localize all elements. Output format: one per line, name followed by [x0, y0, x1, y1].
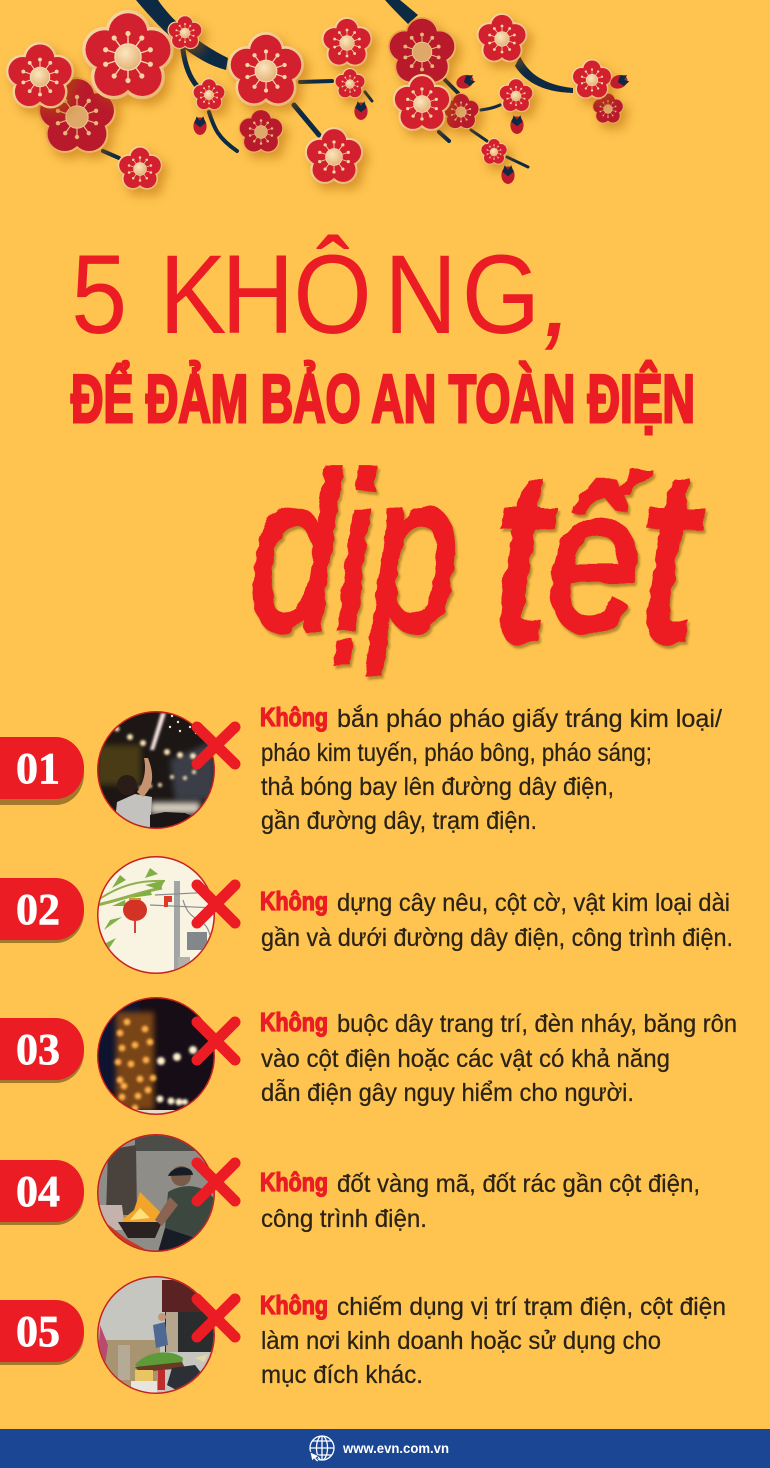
text 03: [260, 1007, 737, 1107]
number badge 03: 03: [16, 1025, 60, 1074]
cherry blossoms left cluster: [6, 10, 372, 190]
text 04: đốt vàng mã, đốt rác gần cột điện,: [337, 1170, 700, 1198]
item 04: [0, 1133, 700, 1253]
text 01: Không: [260, 702, 328, 732]
number badge 05: [0, 1300, 84, 1365]
website: www.evn.com.vn: [342, 1440, 449, 1456]
text 02: [260, 886, 733, 952]
photo: burning votive paper: [96, 1133, 216, 1253]
text 03: dẫn điện gây nguy hiểm cho người.: [261, 1078, 634, 1107]
item 02: [0, 855, 733, 981]
footer bar: [0, 1429, 770, 1468]
text 02: Không: [260, 886, 328, 916]
title brush lettering: t: [640, 418, 702, 692]
title line 1: ,: [544, 256, 567, 355]
photo: lantern and electric pole: [96, 855, 216, 981]
text 05: Không: [260, 1290, 328, 1320]
text 03: Không: [260, 1007, 328, 1037]
text 05: làm nơi kinh doanh hoặc sử dụng cho: [261, 1327, 661, 1355]
text 02: dựng cây nêu, cột cờ, vật kim loại dài: [337, 889, 730, 917]
item 03: [0, 996, 737, 1116]
icon: globe: [310, 1436, 334, 1462]
title line 1: 5 KHÔNG: [71, 232, 540, 357]
title brush lettering: t: [493, 418, 555, 692]
text 04: công trình điện.: [261, 1205, 427, 1233]
text 02: gần và dưới đường dây điện, công trình điện.: [261, 924, 733, 952]
text 01: bắn pháo pháo giấy tráng kim loại/: [337, 704, 722, 733]
text 01: thả bóng bay lên đường dây điện,: [261, 773, 614, 801]
text 04: Không: [260, 1167, 328, 1197]
title brush lettering: [250, 418, 702, 692]
cross mark 02: [197, 885, 235, 923]
text 03: vào cột điện hoặc các vật có khả năng: [261, 1045, 670, 1073]
cross mark 01: [197, 727, 235, 764]
photo: stall at electric pole: [96, 1275, 216, 1395]
number badge 02: [0, 878, 84, 943]
text 05: mục đích khác.: [261, 1361, 423, 1389]
number badge 03: [0, 1018, 84, 1083]
number badge 01: 01: [16, 744, 60, 793]
blossom branches: [103, 0, 573, 167]
text 01: gần đường dây, trạm điện.: [261, 807, 537, 835]
number badge 02: 02: [16, 885, 60, 934]
text 05: chiếm dụng vị trí trạm điện, cột điện: [337, 1293, 726, 1321]
number badge 04: 04: [16, 1167, 60, 1216]
text 05: [260, 1290, 726, 1389]
text 03: buộc dây trang trí, đèn nháy, băng rôn: [337, 1010, 737, 1038]
photo: string lights on tree: [96, 996, 216, 1116]
item 01: [0, 702, 722, 835]
cross mark 04: [197, 1163, 235, 1201]
item 05: [0, 1275, 726, 1395]
text 01: pháo kim tuyến, pháo bông, pháo sáng;: [261, 739, 652, 767]
title brush lettering: dịp: [250, 429, 458, 675]
cross mark 05: [197, 1299, 235, 1337]
cross mark 03: [197, 1022, 235, 1060]
number badge 01: [0, 737, 84, 805]
number badge 05: 05: [16, 1307, 60, 1356]
text 01: [260, 702, 722, 835]
photo: firework sparkler: [96, 710, 216, 830]
number badge 04: [0, 1160, 84, 1225]
cherry blossoms right cluster: [388, 13, 630, 184]
title brush lettering: ế: [548, 445, 650, 674]
text 04: [260, 1167, 700, 1233]
